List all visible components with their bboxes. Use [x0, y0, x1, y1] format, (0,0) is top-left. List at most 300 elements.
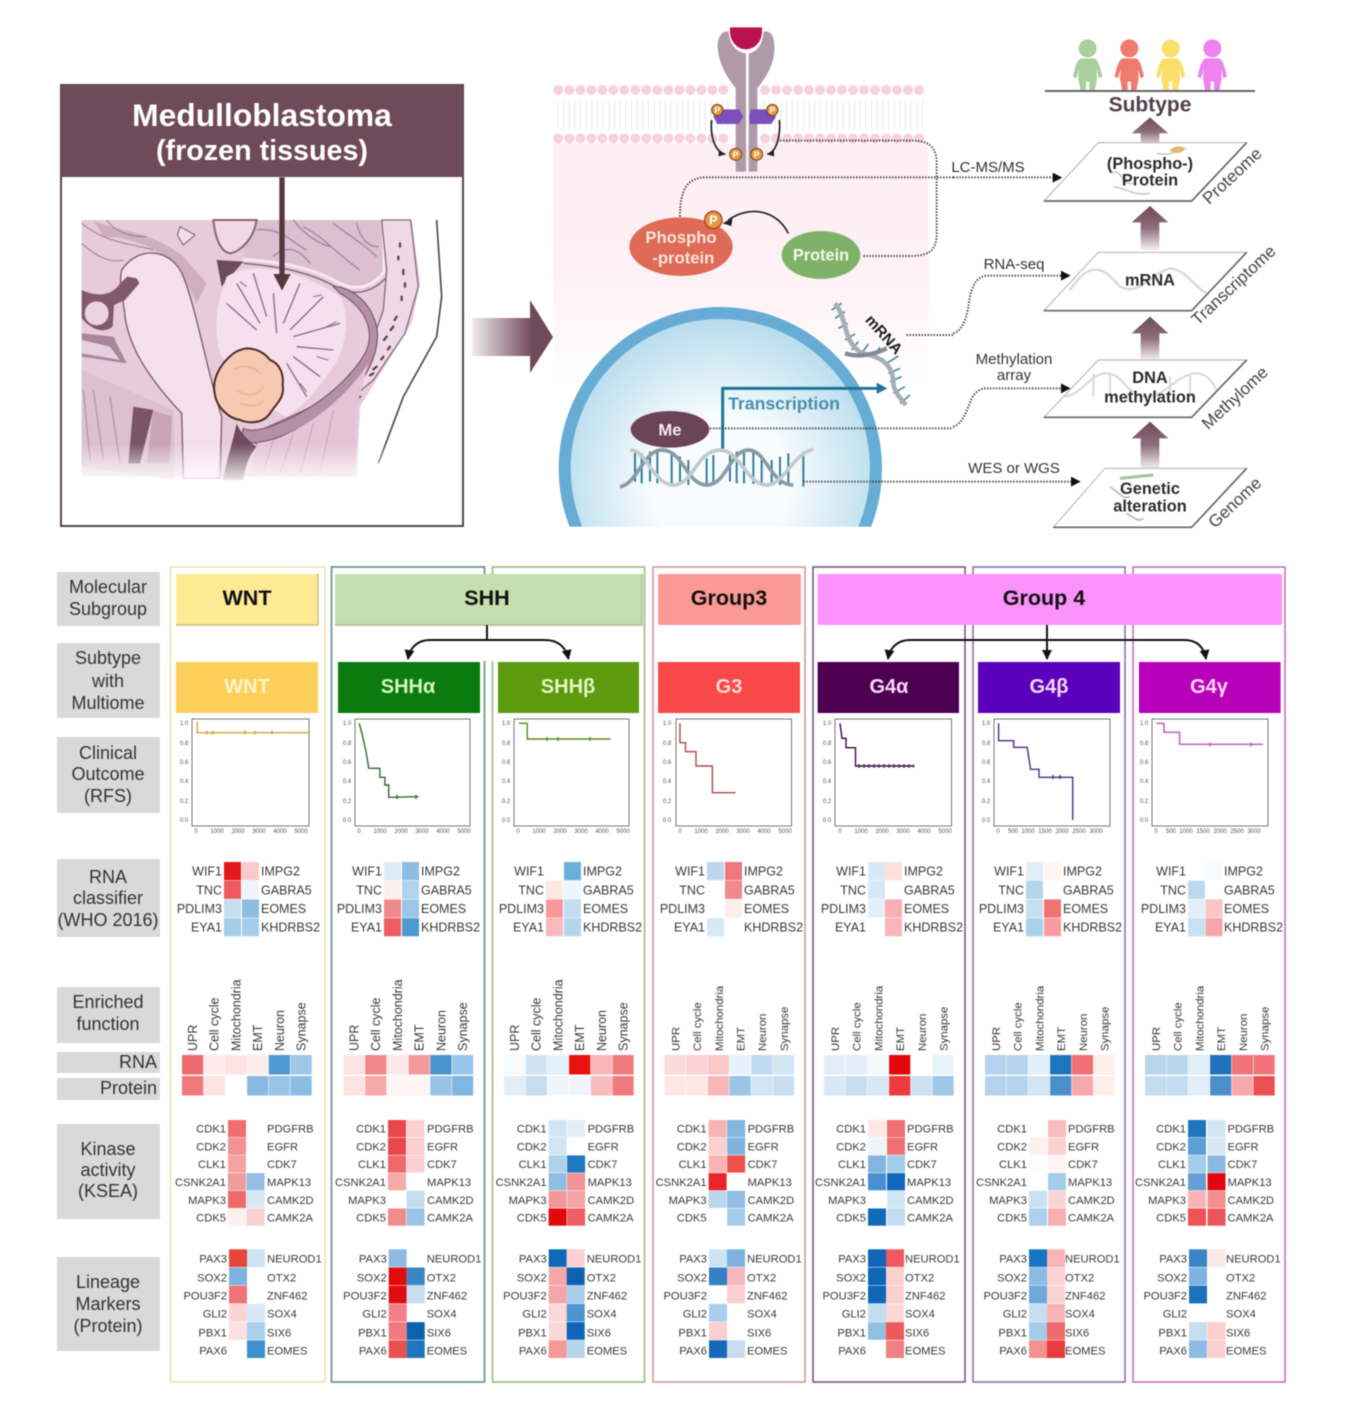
survival plot: 5000	[778, 829, 792, 835]
panel border	[170, 567, 325, 1382]
lineage heatmap: PAX6	[359, 1345, 387, 1357]
lineage heatmap: OTX2	[905, 1272, 934, 1284]
icon: receptor with ligand: P	[754, 149, 760, 159]
lineage heatmap: SOX2	[836, 1272, 866, 1284]
row label: lineage markers: Lineage	[76, 1272, 140, 1292]
lineage heatmap: OTX2	[1226, 1272, 1255, 1284]
kinase heatmap	[656, 1120, 794, 1226]
survival plot: 1000	[373, 829, 387, 835]
survival plot: 0.4	[180, 779, 189, 785]
kinase heatmap: MAPK3	[188, 1195, 226, 1207]
dotted path: protein extraction	[780, 141, 937, 256]
survival plot: 0.0	[663, 818, 672, 824]
kinase heatmap: CAMK2D	[1228, 1195, 1274, 1207]
row label: kinase activity: (KSEA)	[78, 1181, 138, 1201]
lineage heatmap: SIX6	[905, 1327, 929, 1339]
RNA classifier heatmap: WIF1	[836, 864, 866, 878]
survival plot: 1.0	[823, 721, 832, 727]
enriched function heatmap	[504, 1055, 634, 1096]
panel: SHH beta	[492, 567, 644, 1382]
survival plot: 5000	[938, 829, 952, 835]
RNA classifier heatmap	[660, 862, 803, 936]
lineage heatmap: POU3F2	[343, 1290, 387, 1302]
lineage heatmap: PAX6	[999, 1345, 1027, 1357]
lineage heatmap: PAX3	[679, 1253, 707, 1265]
row label: RNA	[57, 1052, 160, 1073]
subtype header	[1139, 662, 1281, 713]
survival plot: 0.2	[502, 799, 511, 805]
survival plot: 1000	[532, 829, 546, 835]
kinase heatmap: MAPK3	[348, 1195, 386, 1207]
protein	[782, 231, 860, 279]
label: mRNA: mRNA	[861, 312, 905, 358]
kinase heatmap: MAPK3	[828, 1195, 866, 1207]
survival plot: 3000	[252, 829, 266, 835]
survival plot: 2000	[875, 829, 889, 835]
header: Group 4 subgroup: Group 4	[1003, 586, 1085, 610]
kinase heatmap: PDGFRB	[1228, 1124, 1274, 1136]
row label: subtype: with	[91, 671, 124, 691]
lineage heatmap: PBX1	[518, 1327, 547, 1339]
lineage heatmap: OTX2	[747, 1272, 776, 1284]
survival plot: 0.2	[982, 799, 991, 805]
kinase heatmap: CLK1	[679, 1159, 707, 1171]
layer: methylome: Methylome	[1198, 363, 1272, 433]
lineage heatmap: GLI2	[203, 1308, 227, 1320]
survival plot: 0	[194, 829, 198, 835]
lineage heatmap: NEUROD1	[1065, 1253, 1120, 1265]
survival plot: 500	[1008, 829, 1019, 835]
kinase heatmap: MAPK3	[669, 1195, 707, 1207]
survival plot: 0.8	[502, 741, 511, 747]
kinase heatmap: PDGFRB	[588, 1124, 634, 1136]
lineage heatmap: GLI2	[362, 1308, 387, 1320]
survival plot: 5000	[457, 829, 471, 835]
lineage heatmap: OTX2	[1065, 1272, 1094, 1284]
survival plot: 0.4	[1140, 779, 1149, 785]
header: Group3 subgroup: Group3	[691, 586, 767, 610]
lineage heatmap: PAX6	[838, 1345, 866, 1357]
enriched function labels: Neuron	[917, 1014, 929, 1051]
lineage heatmap: PAX3	[838, 1253, 866, 1265]
RNA classifier heatmap: TNC	[1160, 884, 1186, 898]
enriched function labels: Mitochondria	[873, 985, 885, 1051]
kinase heatmap	[335, 1120, 474, 1226]
lineage heatmap	[663, 1249, 802, 1358]
survival plot: 1000	[694, 829, 708, 835]
lineage heatmap: SOX4	[427, 1308, 457, 1320]
survival plot: 0.6	[663, 760, 672, 766]
methylation mark: Me	[658, 420, 682, 439]
kinase heatmap: CDK7	[1228, 1159, 1257, 1171]
kinase heatmap: CAMK2D	[427, 1195, 474, 1207]
arrow: pointer to cerebellum	[273, 177, 291, 291]
row label: enriched function	[57, 987, 160, 1043]
kinase heatmap: CSNK2A1	[496, 1177, 547, 1189]
label: LC-MS/MS: LC-MS/MS	[951, 159, 1025, 176]
kinase heatmap: CDK2	[356, 1142, 386, 1154]
enriched function labels	[991, 985, 1112, 1051]
RNA classifier heatmap: WIF1	[192, 864, 222, 878]
survival plot: 0.2	[1140, 799, 1149, 805]
arrow: SHH split right	[487, 640, 568, 659]
enriched function labels	[186, 979, 308, 1051]
survival plot: 0	[838, 829, 842, 835]
membrane bilayer	[557, 90, 923, 138]
dotted path: phosphoprotein extraction	[680, 177, 953, 217]
dotted path: methylation array arrow	[953, 383, 1071, 427]
dotted path: RNA sequencing	[907, 332, 953, 338]
kinase heatmap: CLK1	[358, 1159, 386, 1171]
kinase heatmap: CAMK2D	[1068, 1195, 1115, 1207]
subtype header: G4α	[870, 676, 909, 698]
RNA classifier heatmap: KHDRBS2	[261, 920, 320, 934]
enriched function labels: Mitochondria	[1194, 985, 1206, 1051]
enriched function labels: Synapse	[294, 1002, 308, 1051]
survival plot: 3000	[1089, 829, 1103, 835]
kinase heatmap: CDK5	[836, 1212, 866, 1224]
survival plot	[1140, 719, 1268, 835]
RNA classifier heatmap: TNC	[840, 884, 866, 898]
RNA classifier heatmap: PDLIM3	[821, 902, 866, 916]
enriched function labels	[830, 985, 950, 1051]
phosphoprotein: -protein	[652, 248, 714, 267]
RNA classifier heatmap: EOMES	[744, 902, 789, 916]
RNA classifier heatmap	[337, 862, 480, 936]
lineage heatmap: OTX2	[587, 1272, 616, 1284]
enriched function labels: Synapse	[616, 1002, 630, 1051]
illustration: sagittal brain section with tumour	[73, 177, 442, 487]
RNA classifier heatmap: EYA1	[1155, 920, 1186, 934]
survival plot: 1.0	[343, 721, 352, 727]
enriched function labels: Neuron	[757, 1014, 769, 1051]
lineage heatmap: SIX6	[587, 1327, 611, 1339]
lineage heatmap: GLI2	[1163, 1308, 1187, 1320]
row label: protein	[57, 1078, 160, 1100]
title: Medulloblastoma	[132, 97, 392, 133]
kinase heatmap: MAPK13	[907, 1177, 951, 1189]
RNA classifier heatmap: TNC	[679, 884, 705, 898]
lineage heatmap: PAX6	[679, 1345, 707, 1357]
kinase heatmap: MAPK13	[1068, 1177, 1112, 1189]
kinase heatmap: PDGFRB	[1068, 1124, 1115, 1136]
RNA classifier heatmap: WIF1	[352, 864, 382, 878]
RNA classifier heatmap: EYA1	[351, 920, 382, 934]
survival plot: 0	[678, 829, 682, 835]
lineage heatmap: PAX3	[999, 1253, 1027, 1265]
survival plot	[823, 719, 952, 835]
panel: Group 4 alpha	[813, 567, 965, 1382]
enriched function heatmap	[182, 1055, 312, 1096]
heading: subtype: Subtype	[1109, 93, 1191, 116]
RNA classifier heatmap: EOMES	[583, 902, 628, 916]
kinase heatmap: CDK2	[836, 1142, 866, 1154]
RNA classifier heatmap	[821, 862, 963, 936]
enriched function labels: Neuron	[273, 1010, 287, 1051]
survival plot: 2500	[1072, 829, 1086, 835]
enriched function labels: EMT	[1056, 1027, 1068, 1051]
enriched function heatmap	[1145, 1055, 1275, 1096]
layer: genome	[1053, 468, 1265, 532]
layer: genome: Genetic	[1120, 480, 1180, 498]
RNA classifier heatmap: PDLIM3	[499, 902, 544, 916]
RNA classifier heatmap: WIF1	[1156, 864, 1186, 878]
kinase heatmap: PDGFRB	[907, 1124, 954, 1136]
survival plot: 0.0	[823, 818, 832, 824]
lineage heatmap: PBX1	[998, 1327, 1027, 1339]
lineage heatmap: SOX4	[747, 1308, 777, 1320]
lineage heatmap: GLI2	[1003, 1308, 1027, 1320]
survival plot: 4000	[757, 829, 771, 835]
survival plot: 0.6	[823, 760, 832, 766]
lineage heatmap: PBX1	[1158, 1327, 1187, 1339]
lineage heatmap: PBX1	[678, 1327, 707, 1339]
survival plot	[502, 719, 630, 835]
subtype header: WNT	[224, 676, 270, 698]
survival plot: 4000	[917, 829, 931, 835]
enriched function labels: Neuron	[434, 1010, 448, 1051]
kinase heatmap: CAMK2A	[267, 1212, 314, 1224]
survival plot	[663, 719, 792, 835]
kinase heatmap: PDGFRB	[748, 1124, 794, 1136]
RNA classifier heatmap: TNC	[196, 884, 222, 898]
lineage heatmap: SOX2	[1157, 1272, 1187, 1284]
kinase heatmap: CAMK2A	[907, 1212, 954, 1224]
label: methylation array	[976, 351, 1052, 384]
lineage heatmap: SOX4	[905, 1308, 935, 1320]
kinase heatmap: CSNK2A1	[175, 1177, 226, 1189]
RNA classifier heatmap: EYA1	[674, 920, 705, 934]
lineage heatmap: PAX3	[359, 1253, 387, 1265]
lineage heatmap: GLI2	[842, 1308, 866, 1320]
lineage heatmap: POU3F2	[983, 1290, 1027, 1302]
enriched function labels: EMT	[1216, 1027, 1228, 1051]
lineage heatmap: ZNF462	[427, 1290, 467, 1302]
survival plot: 1.0	[502, 721, 511, 727]
kinase heatmap: EGFR	[267, 1142, 298, 1154]
kinase heatmap: CLK1	[999, 1159, 1027, 1171]
kinase heatmap	[496, 1120, 634, 1226]
RNA classifier heatmap: IMPG2	[904, 864, 943, 878]
layer: transcriptome: Transcriptome	[1188, 242, 1280, 329]
label: RNA-seq: RNA-seq	[984, 256, 1044, 273]
survival plot: 0.4	[502, 779, 511, 785]
RNA classifier heatmap: GABRA5	[1224, 884, 1275, 898]
tissue header	[61, 85, 463, 177]
arrow: methylome to transcriptome	[1132, 317, 1168, 360]
icon: receptor with ligand: P	[769, 105, 775, 115]
RNA classifier heatmap: KHDRBS2	[904, 920, 963, 934]
row label: clinical outcome	[57, 737, 160, 813]
survival plot: 0	[996, 829, 1000, 835]
row label: protein: Protein	[100, 1078, 157, 1098]
lineage heatmap: ZNF462	[1226, 1290, 1266, 1302]
lineage heatmap: PAX3	[519, 1253, 547, 1265]
kinase heatmap: CAMK2D	[267, 1195, 314, 1207]
kinase heatmap: MAPK3	[509, 1195, 547, 1207]
kinase heatmap: CDK1	[356, 1124, 386, 1136]
enriched function labels: Mitochondria	[551, 979, 565, 1051]
RNA classifier heatmap: EOMES	[421, 902, 466, 916]
header: WNT subgroup	[176, 574, 318, 625]
layer: methylome: methylation	[1104, 388, 1196, 406]
kinase heatmap: CDK5	[677, 1212, 707, 1224]
lineage heatmap	[822, 1249, 960, 1358]
lineage heatmap: OTX2	[267, 1272, 296, 1284]
RNA classifier heatmap: EOMES	[1063, 902, 1108, 916]
row label: RNA classifier: (WHO 2016)	[57, 910, 159, 930]
RNA classifier heatmap: GABRA5	[1063, 884, 1114, 898]
survival plot: 1.0	[663, 721, 672, 727]
lineage heatmap: PAX3	[1159, 1253, 1187, 1265]
header: SHH subgroup: SHH	[464, 586, 510, 610]
enriched function labels: UPR	[991, 1027, 1003, 1051]
survival plot: 5000	[294, 829, 308, 835]
survival plot: 0.6	[1140, 760, 1149, 766]
kinase heatmap: CLK1	[198, 1159, 226, 1171]
kinase heatmap: CAMK2A	[588, 1212, 634, 1224]
kinase heatmap: CDK1	[517, 1124, 547, 1136]
survival plot: 0.0	[180, 818, 189, 824]
survival plot: 0.0	[1140, 818, 1149, 824]
panel: WNT	[170, 567, 325, 1382]
enriched function labels: Cell cycle	[208, 997, 222, 1051]
layer: proteome	[1044, 143, 1266, 208]
survival plot: 3000	[574, 829, 588, 835]
layer: transcriptome	[1044, 242, 1280, 329]
lineage heatmap: PAX6	[1159, 1345, 1187, 1357]
header: SHH subgroup	[335, 574, 642, 625]
survival plot: 0.0	[502, 818, 511, 824]
row label: subtype	[57, 643, 160, 718]
RNA classifier heatmap: PDLIM3	[979, 902, 1024, 916]
arrow: phosphorylation	[728, 211, 788, 233]
lineage heatmap: EOMES	[1065, 1345, 1105, 1357]
survival plot: 0.2	[343, 799, 352, 805]
enriched function labels: Neuron	[1238, 1014, 1250, 1051]
arrow: Group 4 split centre	[1046, 625, 1048, 659]
survival plot: 3000	[415, 829, 429, 835]
survival plot: 1.0	[180, 721, 189, 727]
survival plot: 1500	[1038, 829, 1052, 835]
enriched function heatmap	[664, 1055, 794, 1096]
survival plot: 0.0	[343, 818, 352, 824]
panel border	[332, 567, 484, 1382]
kinase heatmap: CAMK2A	[1068, 1212, 1115, 1224]
icon: tumour	[214, 348, 283, 422]
RNA classifier heatmap: PDLIM3	[177, 902, 222, 916]
subtype header	[498, 662, 639, 713]
RNA classifier heatmap	[1141, 862, 1283, 936]
kinase heatmap: CSNK2A1	[976, 1177, 1027, 1189]
kinase heatmap: CLK1	[838, 1159, 866, 1171]
survival plot: 0.8	[823, 741, 832, 747]
kinase heatmap: CDK2	[677, 1142, 707, 1154]
panel frame	[61, 85, 463, 526]
RNA classifier heatmap: GABRA5	[744, 884, 795, 898]
arrow: tissue to multiome	[472, 300, 553, 373]
layer: methylome	[1044, 360, 1272, 433]
survival plot: 0.6	[502, 760, 511, 766]
enriched function labels: Mitochondria	[391, 979, 405, 1051]
kinase heatmap: CAMK2A	[427, 1212, 474, 1224]
RNA classifier heatmap: IMPG2	[261, 864, 300, 878]
RNA classifier heatmap: KHDRBS2	[1224, 920, 1283, 934]
arrow: SHH split	[408, 625, 487, 659]
RNA classifier heatmap: TNC	[356, 884, 382, 898]
kinase heatmap: CDK1	[196, 1124, 226, 1136]
methylation mark	[631, 411, 709, 448]
survival plot: 0.8	[343, 741, 352, 747]
lineage heatmap: GLI2	[522, 1308, 547, 1320]
lineage heatmap	[503, 1249, 641, 1358]
enriched function heatmap	[824, 1055, 954, 1096]
row label: enriched function: function	[76, 1014, 140, 1034]
enriched function labels: Mitochondria	[1034, 985, 1046, 1051]
kinase heatmap: CDK7	[748, 1159, 777, 1171]
row label: subtype: Subtype	[75, 648, 141, 668]
RNA classifier heatmap: IMPG2	[1063, 864, 1102, 878]
kinase heatmap: CDK2	[196, 1142, 226, 1154]
RNA classifier heatmap: EYA1	[993, 920, 1024, 934]
enriched function labels: UPR	[508, 1025, 522, 1051]
lineage heatmap: NEUROD1	[1226, 1253, 1281, 1265]
RNA classifier heatmap	[979, 862, 1122, 936]
lineage heatmap: POU3F2	[503, 1290, 547, 1302]
enriched function labels: UPR	[670, 1027, 682, 1051]
enriched function labels	[508, 979, 630, 1051]
lineage heatmap: SOX2	[517, 1272, 547, 1284]
kinase heatmap: CDK7	[588, 1159, 617, 1171]
enriched function labels: Cell cycle	[852, 1002, 864, 1051]
label: methylation array: array	[997, 367, 1032, 384]
arrow: Group 4 split right	[1047, 640, 1206, 659]
layer: genome: Genome	[1205, 473, 1265, 532]
survival plot: 2000	[231, 829, 245, 835]
lineage heatmap: NEUROD1	[267, 1253, 322, 1265]
icon: DNA helix	[620, 449, 813, 487]
lineage heatmap: ZNF462	[905, 1290, 945, 1302]
RNA classifier heatmap: KHDRBS2	[1063, 920, 1122, 934]
RNA classifier heatmap: GABRA5	[261, 884, 312, 898]
kinase heatmap: CDK7	[267, 1159, 297, 1171]
kinase heatmap: CDK7	[1068, 1159, 1098, 1171]
subtype header	[658, 662, 800, 713]
kinase heatmap: MAPK13	[1228, 1177, 1272, 1189]
enriched function labels: Mitochondria	[714, 985, 726, 1051]
RNA classifier heatmap: IMPG2	[744, 864, 783, 878]
kinase heatmap: EGFR	[1068, 1142, 1099, 1154]
subtype header	[818, 662, 959, 713]
lineage heatmap: SIX6	[1226, 1327, 1250, 1339]
kinase heatmap: CDK2	[517, 1142, 547, 1154]
kinase heatmap: MAPK3	[1148, 1195, 1186, 1207]
kinase heatmap: CDK5	[196, 1212, 226, 1224]
dotted path: RNA-seq arrow	[953, 271, 1071, 333]
lineage heatmap: SOX2	[677, 1272, 707, 1284]
row label: subtype: Multiome	[71, 693, 145, 713]
enriched function labels	[1151, 985, 1272, 1051]
header: Group 4 subgroup	[818, 574, 1282, 625]
enriched function heatmap	[344, 1055, 473, 1096]
enriched function labels: Cell cycle	[369, 997, 383, 1051]
RNA classifier heatmap: EYA1	[513, 920, 544, 934]
kinase heatmap: MAPK13	[748, 1177, 792, 1189]
row label: molecular subgroup	[57, 572, 160, 626]
survival plot: 2000	[394, 829, 408, 835]
lineage heatmap	[183, 1249, 322, 1358]
enriched function labels	[670, 985, 791, 1051]
